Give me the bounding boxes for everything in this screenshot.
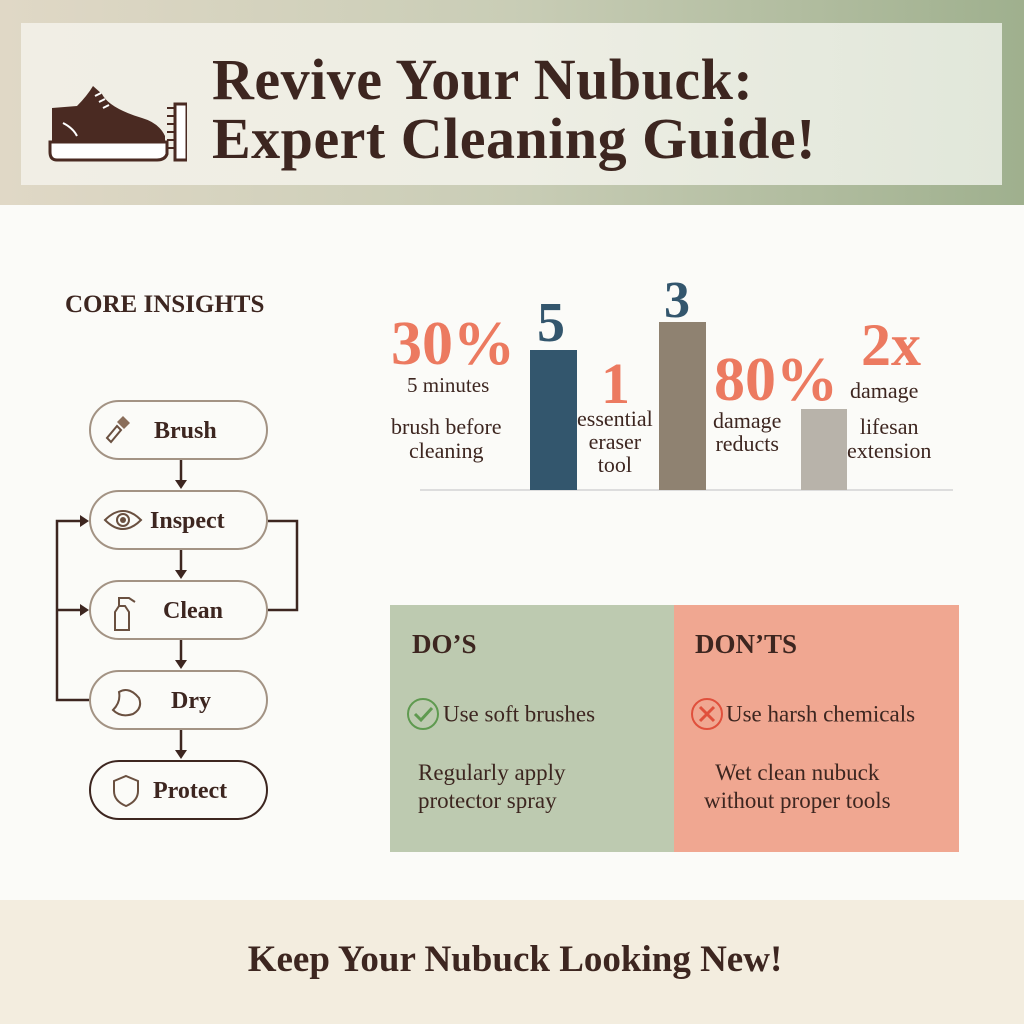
icon: shoe and brush xyxy=(48,86,187,162)
bar chart: 5 minutes xyxy=(407,373,489,397)
bar chart: cleaning xyxy=(409,438,484,463)
bar chart: tool xyxy=(598,452,632,477)
heading: core insights: CORE INSIGHTS xyxy=(65,291,264,318)
step: inspect: Inspect xyxy=(150,508,225,534)
text xyxy=(418,760,566,813)
bar grey xyxy=(801,409,847,490)
footer band xyxy=(0,900,1024,1024)
text: without proper tools xyxy=(704,788,891,813)
step: dry xyxy=(89,670,268,730)
stat 80%: 80% xyxy=(714,346,838,414)
item with check icon xyxy=(407,698,595,730)
step: clean xyxy=(89,580,268,640)
bar chart: essential xyxy=(577,406,653,431)
step: protect xyxy=(89,760,268,820)
stat 2x: 2x xyxy=(861,312,921,378)
item with check icon: Use soft brushes xyxy=(443,702,595,726)
stat 5: 5 xyxy=(537,292,565,354)
bar chart: damage xyxy=(850,378,918,403)
panel: don'ts xyxy=(674,605,959,852)
step: inspect xyxy=(89,490,268,550)
bar blue xyxy=(530,350,577,490)
bar chart xyxy=(391,272,953,491)
header panel xyxy=(21,23,1002,185)
panel: do's xyxy=(390,605,674,852)
step: dry: Dry xyxy=(171,688,211,714)
bar chart: reducts xyxy=(715,431,779,456)
stat 30%: 30% xyxy=(391,310,515,378)
step: clean: Clean xyxy=(163,598,223,624)
header band xyxy=(0,0,1024,205)
text: protector spray xyxy=(418,788,557,813)
bar chart: brush before xyxy=(391,414,502,439)
text: Regularly apply xyxy=(418,760,566,785)
footer text: Keep Your Nubuck Looking New! xyxy=(248,939,782,980)
axis xyxy=(420,489,953,491)
stat 1: 1 xyxy=(601,351,630,416)
item with x icon xyxy=(691,698,915,730)
text: Wet clean nubuck xyxy=(715,760,879,785)
step: protect: Protect xyxy=(153,778,227,804)
stat 3: 3 xyxy=(664,272,690,329)
bar chart: damage xyxy=(713,408,781,433)
title: Revive Your Nubuck: xyxy=(212,47,753,112)
bar brown xyxy=(659,322,706,490)
step: brush xyxy=(89,400,268,460)
flowchart xyxy=(56,400,298,820)
heading: DO’S xyxy=(412,629,477,659)
title: Expert Cleaning Guide! xyxy=(212,106,816,171)
text xyxy=(704,760,891,813)
item with x icon: Use harsh chemicals xyxy=(726,702,915,726)
step: brush: Brush xyxy=(154,418,217,444)
title xyxy=(212,47,816,171)
bar chart: eraser xyxy=(589,429,641,454)
bar chart: extension xyxy=(847,438,931,463)
heading: DON’TS xyxy=(695,629,797,659)
bar chart: lifesan xyxy=(860,414,918,439)
